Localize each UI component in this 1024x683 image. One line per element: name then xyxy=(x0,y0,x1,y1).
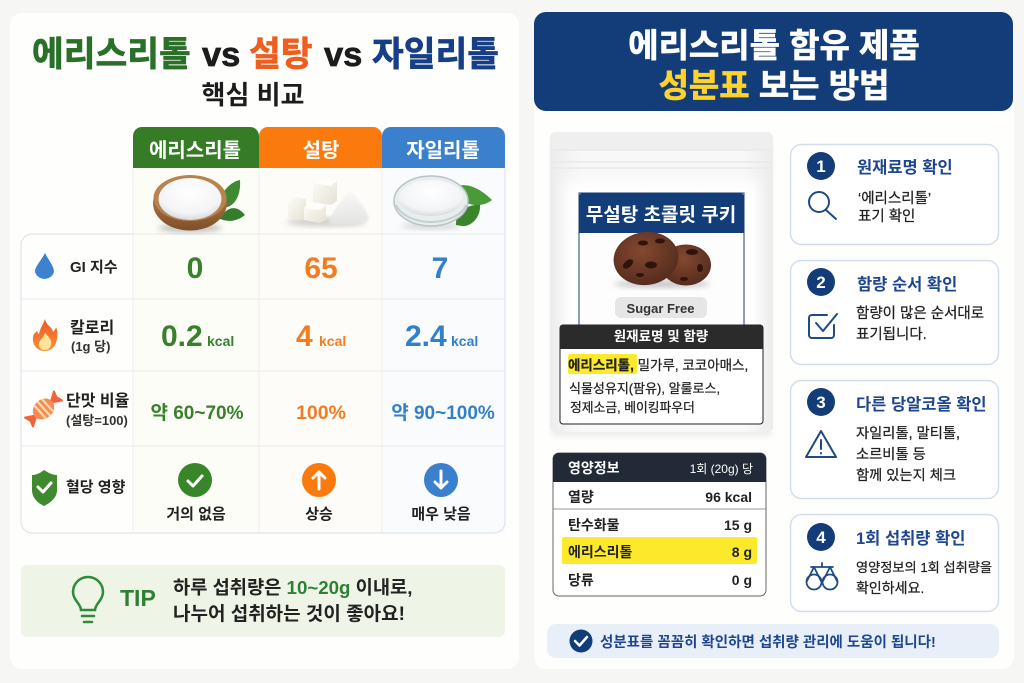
step 3 card: 다른 당알코올 확인 xyxy=(856,394,987,414)
step 4 card: 영양정보의 1회 섭취량을 xyxy=(856,560,992,575)
ingredient box: 에리스리톨, 밀가루, 코코아매스, xyxy=(568,358,748,373)
icon: water drop xyxy=(35,253,54,279)
step 4 card: 확인하세요. xyxy=(856,580,924,596)
row: GI index: 0 xyxy=(187,252,203,285)
row: calories: 칼로리 xyxy=(70,319,114,337)
row: calories: kcal xyxy=(451,333,478,349)
sugar free badge: Sugar Free xyxy=(627,301,694,316)
column header: erythritol xyxy=(133,127,259,168)
row: calories xyxy=(33,319,478,354)
image: sugar cubes xyxy=(286,179,369,226)
bottom note xyxy=(547,624,999,658)
row: calories: 0.2 xyxy=(161,320,203,353)
icon: light bulb xyxy=(73,577,103,622)
sugar free badge xyxy=(615,297,707,318)
step 2 card: 2 xyxy=(816,273,826,292)
icon: arrow up xyxy=(302,463,336,497)
image: xylitol glass bowl xyxy=(394,176,492,229)
column header: xylitol: 자일리톨 xyxy=(406,139,480,162)
nutrition table: 0 g xyxy=(732,572,752,588)
column header: sugar: 설탕 xyxy=(303,139,339,162)
ingredient box: 원재료명 및 함량 xyxy=(614,329,709,344)
row: GI index: 7 xyxy=(432,252,448,285)
header banner: 성분표 보는 방법 xyxy=(659,67,889,104)
step 4 card xyxy=(790,514,998,612)
row: blood sugar xyxy=(32,463,471,523)
column header: xylitol xyxy=(382,127,505,168)
row: calories: 4 xyxy=(296,320,313,353)
ingredient box: 정제소금, 베이킹파우더 xyxy=(570,400,695,415)
nutrition table: 열량 xyxy=(568,489,594,505)
step 2 card: 표기됩니다. xyxy=(856,326,927,343)
row: calories: kcal xyxy=(207,333,234,349)
step 2 card xyxy=(790,260,998,364)
icon: arrow down xyxy=(424,463,458,497)
icon: scale xyxy=(806,563,838,590)
header banner: 에리스리톨 함유 제품 xyxy=(628,27,920,64)
step 4 card: 1회 섭취량 확인 xyxy=(856,529,965,548)
icon: magnifier xyxy=(809,192,836,219)
step 3 card: 자일리톨, 말티톨, xyxy=(856,425,960,442)
tip box: TIP xyxy=(120,585,156,611)
step 2 card: 함량 순서 확인 xyxy=(857,275,957,294)
nutrition table: 96 kcal xyxy=(705,489,752,505)
nutrition table: 8 g xyxy=(732,544,752,560)
icon: warning xyxy=(806,431,836,457)
subtitle: 핵심 비교 xyxy=(202,80,304,110)
step 2 card: 함량이 많은 순서대로 xyxy=(856,305,984,322)
nutrition table: 영양정보 xyxy=(568,460,620,476)
title: vs xyxy=(202,36,240,74)
step 1 card: ‘에리스리톨’ xyxy=(858,190,931,207)
title: vs xyxy=(324,36,362,74)
row: sweetness: 단맛 비율 xyxy=(66,392,130,410)
step 1 card: 표기 확인 xyxy=(858,208,915,225)
ingredient box xyxy=(560,325,763,424)
image: erythritol bowl xyxy=(153,175,245,232)
package label: 무설탕 초콜릿 쿠키 xyxy=(586,204,736,226)
icon: shield xyxy=(32,470,57,506)
nutrition table: 에리스리톨 xyxy=(568,544,633,560)
nutrition table: 탄수화물 xyxy=(568,517,620,533)
row: GI index: 65 xyxy=(304,252,338,285)
tip box xyxy=(21,565,505,637)
icon: check xyxy=(178,463,212,497)
ingredient box: 식물성유지(팜유), 알룰로스, xyxy=(569,381,720,396)
row: blood sugar: 거의 없음 xyxy=(166,506,226,523)
row: GI index xyxy=(35,252,448,285)
icon: checkbox xyxy=(809,314,837,338)
step 1 card xyxy=(790,144,998,244)
title: 에리스리톨 xyxy=(32,36,191,74)
column header: sugar xyxy=(259,127,382,168)
nutrition table: 당류 xyxy=(568,572,594,588)
step 3 card: 3 xyxy=(816,393,826,412)
icon: flame xyxy=(33,319,57,351)
title: 자일리톨 xyxy=(372,36,499,74)
table background xyxy=(21,168,505,533)
nutrition table: 15 g xyxy=(724,517,752,533)
row: sweetness: 100% xyxy=(296,402,346,424)
step 1 card: 원재료명 확인 xyxy=(857,158,953,177)
row: blood sugar: 상승 xyxy=(305,506,333,523)
row: sweetness: 약 90~100% xyxy=(391,402,495,424)
step 4 card: 4 xyxy=(816,528,826,547)
title: 설탕 xyxy=(249,36,312,74)
step 3 card: 소르비톨 등 xyxy=(856,446,926,463)
nutrition table: 1회 (20g) 당 xyxy=(690,462,753,476)
row: blood sugar: 혈당 영향 xyxy=(66,479,126,496)
comparison table xyxy=(21,127,505,533)
step 3 card: 함께 있는지 체크 xyxy=(856,467,956,484)
row: blood sugar: 매우 낮음 xyxy=(411,506,471,523)
package label xyxy=(579,193,744,343)
product package xyxy=(550,132,773,436)
tip box: 하루 섭취량은 10~20g 이내로, xyxy=(173,577,412,598)
panel: how to read labels xyxy=(534,12,1014,669)
header banner xyxy=(534,12,1013,111)
row: GI index: GI 지수 xyxy=(70,259,118,276)
bottom note: 성분표를 꼼꼼히 확인하면 섭취량 관리에 도움이 됩니다! xyxy=(600,634,936,651)
row: calories: kcal xyxy=(319,333,346,349)
panel: comparison xyxy=(10,13,519,669)
icon: candy xyxy=(23,389,64,429)
title xyxy=(32,36,499,74)
row: sweetness: (설탕=100) xyxy=(66,413,128,428)
tip box: 나누어 섭취하는 것이 좋아요! xyxy=(173,603,405,625)
row: sweetness: 약 60~70% xyxy=(150,402,244,424)
row: sweetness xyxy=(23,389,495,429)
row: calories: 2.4 xyxy=(405,320,447,353)
row: calories: (1g 당) xyxy=(71,339,110,354)
step 3 card xyxy=(790,380,998,498)
image: cookies xyxy=(610,228,711,289)
nutrition table xyxy=(553,453,766,596)
step 1 card: 1 xyxy=(816,157,826,176)
column header: erythritol: 에리스리톨 xyxy=(149,139,241,162)
